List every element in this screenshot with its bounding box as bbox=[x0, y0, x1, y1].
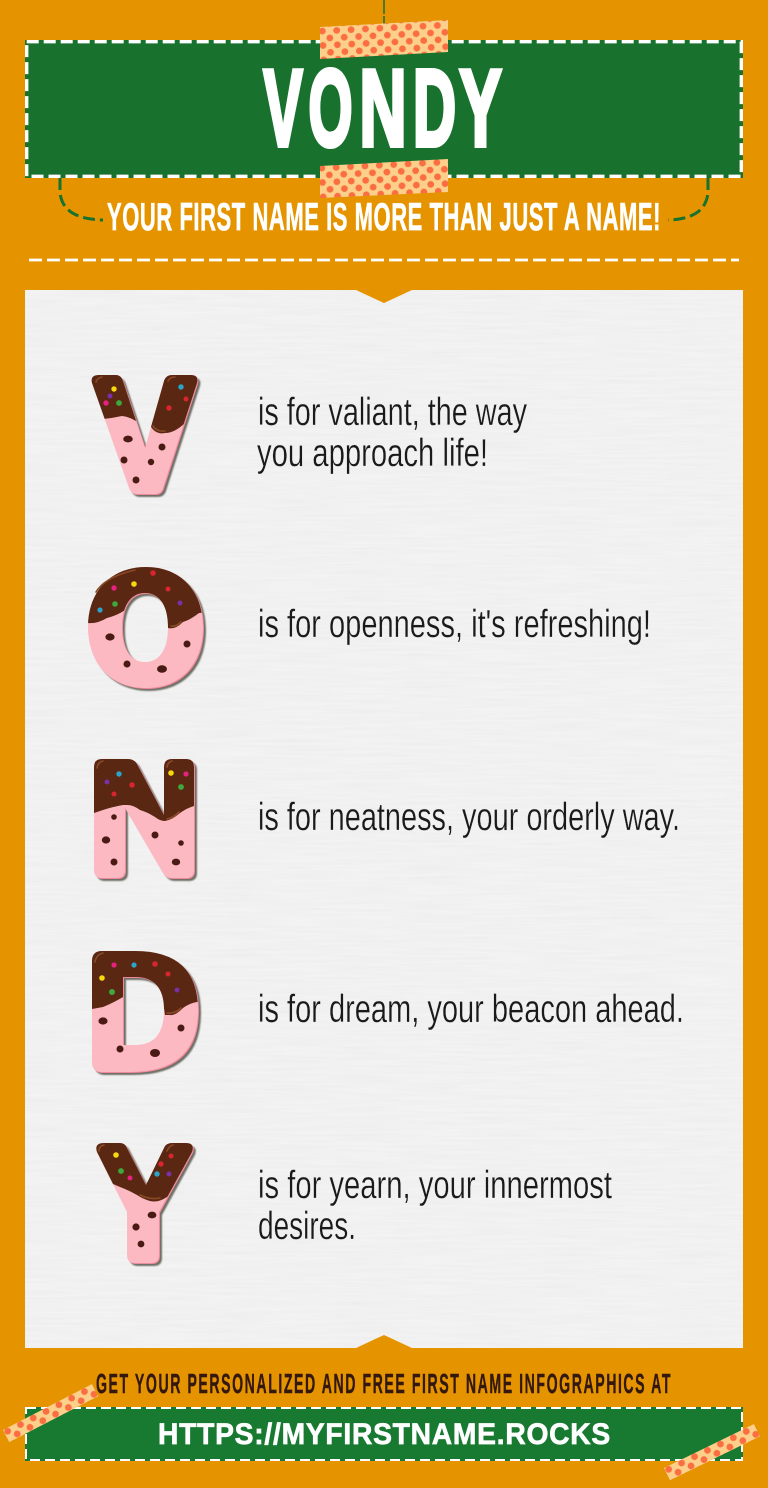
title: V bbox=[264, 48, 302, 170]
top tape bbox=[320, 20, 448, 59]
text: V: is for valiant, the way bbox=[258, 391, 527, 434]
right tape bbox=[664, 1424, 760, 1480]
text: Y: is for yearn, your innermost bbox=[258, 1164, 612, 1207]
letter Y bbox=[96, 1143, 197, 1267]
footer url: HTTPS://MYFIRSTNAME.ROCKS bbox=[158, 1418, 611, 1451]
footer banner bbox=[25, 1407, 743, 1461]
title: N bbox=[360, 48, 406, 170]
text: V: you approach life! bbox=[257, 432, 488, 475]
left connector bbox=[60, 178, 103, 220]
letter O bbox=[88, 567, 207, 692]
title: Y bbox=[460, 48, 502, 170]
left tape bbox=[3, 1384, 98, 1442]
text: V bbox=[257, 391, 527, 475]
text: Y bbox=[258, 1164, 612, 1248]
right connector bbox=[668, 178, 708, 220]
letter D bbox=[92, 951, 202, 1076]
bottom tape bbox=[320, 159, 448, 198]
letter N bbox=[90, 755, 200, 881]
title: O bbox=[308, 48, 352, 170]
header banner bbox=[25, 0, 743, 198]
green title panel bbox=[25, 40, 743, 178]
title: D bbox=[413, 48, 456, 170]
letter V bbox=[92, 375, 202, 498]
text: Y: desires. bbox=[258, 1205, 356, 1248]
dashed divider bbox=[29, 259, 739, 261]
title bbox=[264, 48, 502, 170]
paper panel bbox=[25, 290, 743, 1348]
